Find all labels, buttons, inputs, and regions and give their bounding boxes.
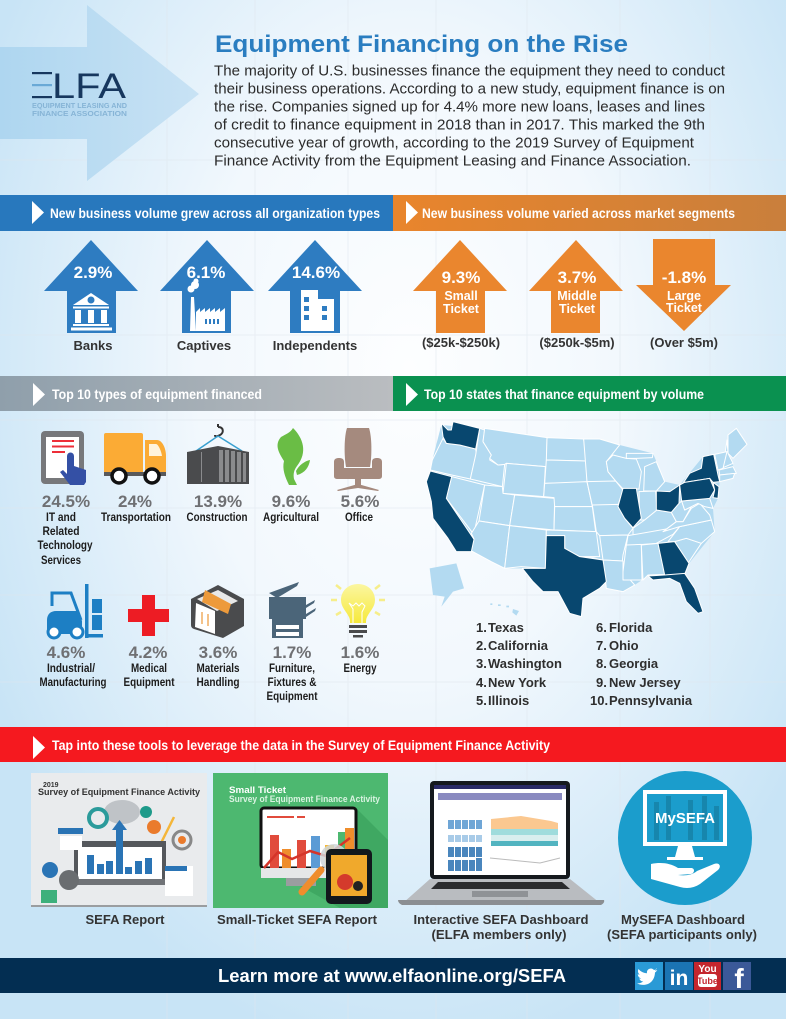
list: states 1-5: California xyxy=(488,638,549,653)
icon: leaf xyxy=(278,428,310,485)
stat: industrial: Manufacturing xyxy=(40,675,106,689)
arrow: small ticket 9.3%: Small xyxy=(444,289,478,303)
list: states 6-10: 6. xyxy=(596,620,607,635)
state: Illinois xyxy=(618,488,641,528)
banner: organization types xyxy=(0,195,393,231)
icon: shipping container xyxy=(187,424,249,484)
arrow: middle ticket 3.7% xyxy=(529,240,623,350)
arrow: large ticket -1.8%: (Over $5m) xyxy=(650,335,718,350)
stat: energy xyxy=(341,643,379,675)
label: MySEFA dashboard xyxy=(607,912,757,942)
icon: linkedin xyxy=(665,962,693,990)
banner: top states: Top 10 states that finance equipment by volume xyxy=(424,386,704,402)
icon: facebook: f xyxy=(734,963,744,994)
icon: light bulb xyxy=(331,584,385,638)
icon: medical cross xyxy=(128,595,169,636)
icon: twitter xyxy=(635,962,663,990)
banner: tools xyxy=(0,727,786,762)
stat: office xyxy=(341,492,379,524)
stat: IT: IT and xyxy=(46,510,76,524)
banner: tools: Tap into these tools to leverage the data in the Survey of Equipment Finance Activity xyxy=(52,737,550,753)
stat: materials handling: 3.6% xyxy=(199,643,237,662)
stat: furniture xyxy=(266,643,318,703)
intro text block xyxy=(214,62,726,170)
panel: small ticket report cover: Survey of Equipment Finance Activity xyxy=(229,794,381,805)
panel: SEFA report cover: Survey of Equipment Finance Activity xyxy=(38,787,201,798)
banner: equipment types xyxy=(0,376,393,411)
list: states 1-5: Washington xyxy=(488,656,562,671)
stat: energy: 1.6% xyxy=(341,643,379,662)
stat: industrial: 4.6% xyxy=(47,643,85,662)
arrow: small ticket 9.3% xyxy=(413,240,507,350)
stat: construction: Construction xyxy=(186,510,248,524)
list: states 6-10: Georgia xyxy=(609,656,659,671)
stat: materials handling xyxy=(196,643,240,689)
list: states 6-10: Pennsylvania xyxy=(609,693,693,708)
panel: SEFA report cover: 2019 xyxy=(43,782,59,789)
icon: youtube xyxy=(694,962,721,990)
stat: materials handling: Handling xyxy=(196,675,240,689)
stat: materials handling: Materials xyxy=(196,661,240,675)
banner: equipment types: Top 10 types of equipment financed xyxy=(52,386,262,402)
stat: IT: 24.5% xyxy=(42,492,90,511)
stat: office: Office xyxy=(345,510,373,524)
icon: youtube: Tube xyxy=(697,976,718,986)
panel: equipment types row 2 xyxy=(40,582,385,703)
panel: interactive dashboard laptop xyxy=(398,781,604,905)
stat: IT: Related xyxy=(42,524,80,538)
footer link text: Learn more at www.elfaonline.org/SEFA xyxy=(218,966,566,986)
list: states 6-10: 10. xyxy=(590,693,608,708)
stat: IT: Technology xyxy=(38,538,93,552)
arrow: middle ticket 3.7%: ($250k-$5m) xyxy=(539,335,615,350)
stat: transportation: 24% xyxy=(118,492,152,511)
label: small ticket SEFA report: Small-Ticket SEFA Report xyxy=(217,912,378,927)
stat: construction xyxy=(186,492,248,524)
arrow: small ticket 9.3%: ($25k-$250k) xyxy=(422,335,500,350)
list: states 6-10 xyxy=(590,620,693,708)
label: interactive dashboard: Interactive SEFA Dashboard xyxy=(414,912,589,927)
icon: youtube: You xyxy=(698,964,717,975)
state: New Jersey xyxy=(713,482,719,498)
arrow: independents 14.6%: 14.6% xyxy=(292,263,340,282)
state: Ohio xyxy=(656,485,680,512)
icon: box xyxy=(191,585,244,638)
panel: small ticket report cover: Small Ticket xyxy=(229,785,287,796)
state: Pennsylvania xyxy=(680,478,715,501)
list: states 6-10: Ohio xyxy=(609,638,639,653)
state: California xyxy=(426,471,474,552)
list: states 6-10: 9. xyxy=(596,675,607,690)
state: Florida xyxy=(648,573,703,613)
panel: organization types arrows xyxy=(44,240,362,353)
list: states 1-5: 5. xyxy=(476,693,487,708)
panel: market segment arrows xyxy=(413,239,731,350)
stat: industrial: Industrial/ xyxy=(47,661,96,675)
arrow: captives 6.1%: 6.1% xyxy=(187,263,225,282)
arrow: captives 6.1% xyxy=(160,240,254,353)
state: New York xyxy=(684,454,720,482)
label: MySEFA dashboard: MySEFA Dashboard xyxy=(621,912,745,927)
arrow: middle ticket 3.7%: Middle xyxy=(557,289,597,303)
intro text block: of credit to finance equipment in 2018 than in 2017. This marked the 9th xyxy=(214,116,705,134)
stat: agricultural xyxy=(263,492,319,524)
footer bar xyxy=(0,958,786,994)
ELFA logo: LFA xyxy=(52,67,127,106)
arrow: independents 14.6%: Independents xyxy=(273,338,357,353)
intro text block: their business operations. According to a new study, equipment finance is on xyxy=(214,80,725,98)
stat: medical: Equipment xyxy=(124,675,175,689)
stat: furniture: Furniture, xyxy=(269,661,315,675)
ELFA logo xyxy=(32,67,128,118)
arrow: small ticket 9.3%: 9.3% xyxy=(442,268,480,287)
panel: MySEFA circle icon xyxy=(618,771,752,905)
arrow: captives 6.1%: Captives xyxy=(177,338,231,353)
list: states 1-5: Texas xyxy=(488,620,524,635)
list: states 6-10: Florida xyxy=(609,620,653,635)
arrow: large ticket -1.8%: Ticket xyxy=(666,301,703,315)
stat: agricultural: Agricultural xyxy=(263,510,319,524)
stat: medical: 4.2% xyxy=(129,643,167,662)
banner: organization types: New business volume grew across all organization types xyxy=(50,205,380,221)
icon: truck xyxy=(104,433,166,483)
stat: furniture: 1.7% xyxy=(273,643,311,662)
banner: market segments: New business volume varied across market segments xyxy=(422,205,735,221)
intro text block: The majority of U.S. businesses finance the equipment they need to conduct xyxy=(214,62,726,80)
arrow: banks 2.9% xyxy=(44,240,138,353)
panel: small ticket report cover xyxy=(213,773,388,908)
list: states 1-5: 2. xyxy=(476,638,487,653)
intro text block: the rise. Companies signed up for 4.4% more new loans, leases and lines xyxy=(214,98,705,116)
stat: office: 5.6% xyxy=(341,492,379,511)
label: interactive dashboard xyxy=(414,912,589,942)
arrow: independents 14.6% xyxy=(268,240,362,353)
list: states 1-5 xyxy=(476,620,562,708)
list: states 1-5: 1. xyxy=(476,620,487,635)
stat: IT: Services xyxy=(41,553,81,567)
label: interactive dashboard: (ELFA members only) xyxy=(432,927,566,942)
list: states 1-5: 3. xyxy=(476,656,487,671)
icon: linkedin: in xyxy=(670,967,688,990)
icon: copier xyxy=(269,582,316,638)
state: Georgia xyxy=(658,542,689,575)
stat: construction: 13.9% xyxy=(194,492,242,511)
ELFA logo: EQUIPMENT LEASING AND xyxy=(32,101,128,110)
arrow: middle ticket 3.7%: Ticket xyxy=(559,302,596,316)
stat: medical xyxy=(124,643,175,689)
icon: facebook xyxy=(723,962,751,994)
arrow: large ticket -1.8% xyxy=(636,239,731,350)
state: Texas xyxy=(522,536,606,617)
label: SEFA report: SEFA Report xyxy=(86,912,165,927)
intro text block: consecutive year of growth, according to the 2019 Survey of Equipment xyxy=(214,134,695,152)
stat: energy: Energy xyxy=(344,661,377,675)
intro text block: Finance Activity from the Equipment Leasing and Finance Association. xyxy=(214,152,691,170)
stat: agricultural: 9.6% xyxy=(272,492,310,511)
panel: MySEFA circle icon: MySEFA xyxy=(655,810,715,827)
arrow: large ticket -1.8%: Large xyxy=(667,289,701,303)
arrow: banks 2.9%: 2.9% xyxy=(74,263,112,282)
list: states 1-5: New York xyxy=(488,675,547,690)
icon: IT tablet xyxy=(41,431,86,485)
panel: equipment types row 1 xyxy=(38,424,382,567)
arrow: middle ticket 3.7%: 3.7% xyxy=(558,268,596,287)
icon: forklift xyxy=(47,584,103,638)
stat: transportation: Transportation xyxy=(101,510,171,524)
label: MySEFA dashboard: (SEFA participants only) xyxy=(607,927,757,942)
header arrow background xyxy=(0,5,199,181)
stat: transportation xyxy=(101,492,171,524)
stat: IT xyxy=(38,492,93,567)
ELFA logo: FINANCE ASSOCIATION xyxy=(32,109,127,118)
list: states 6-10: New Jersey xyxy=(609,675,681,690)
banner: market segments xyxy=(393,195,786,231)
stat: furniture: Equipment xyxy=(266,689,318,703)
arrow: large ticket -1.8%: -1.8% xyxy=(662,268,706,287)
list: states 1-5: Illinois xyxy=(488,693,529,708)
list: states 6-10: 8. xyxy=(596,656,607,671)
arrow: banks 2.9%: Banks xyxy=(73,338,113,353)
list: states 1-5: 4. xyxy=(476,675,487,690)
title: Equipment Financing on the Rise xyxy=(215,31,628,58)
icon: office chair xyxy=(334,428,382,491)
stat: medical: Medical xyxy=(131,661,167,675)
arrow: small ticket 9.3%: Ticket xyxy=(443,302,480,316)
panel: SEFA report cover xyxy=(31,773,207,907)
state: Washington xyxy=(441,422,480,449)
banner: top states xyxy=(393,376,786,411)
list: states 6-10: 7. xyxy=(596,638,607,653)
stat: industrial xyxy=(40,643,106,689)
map: top states xyxy=(426,422,747,617)
stat: furniture: Fixtures & xyxy=(268,675,317,689)
